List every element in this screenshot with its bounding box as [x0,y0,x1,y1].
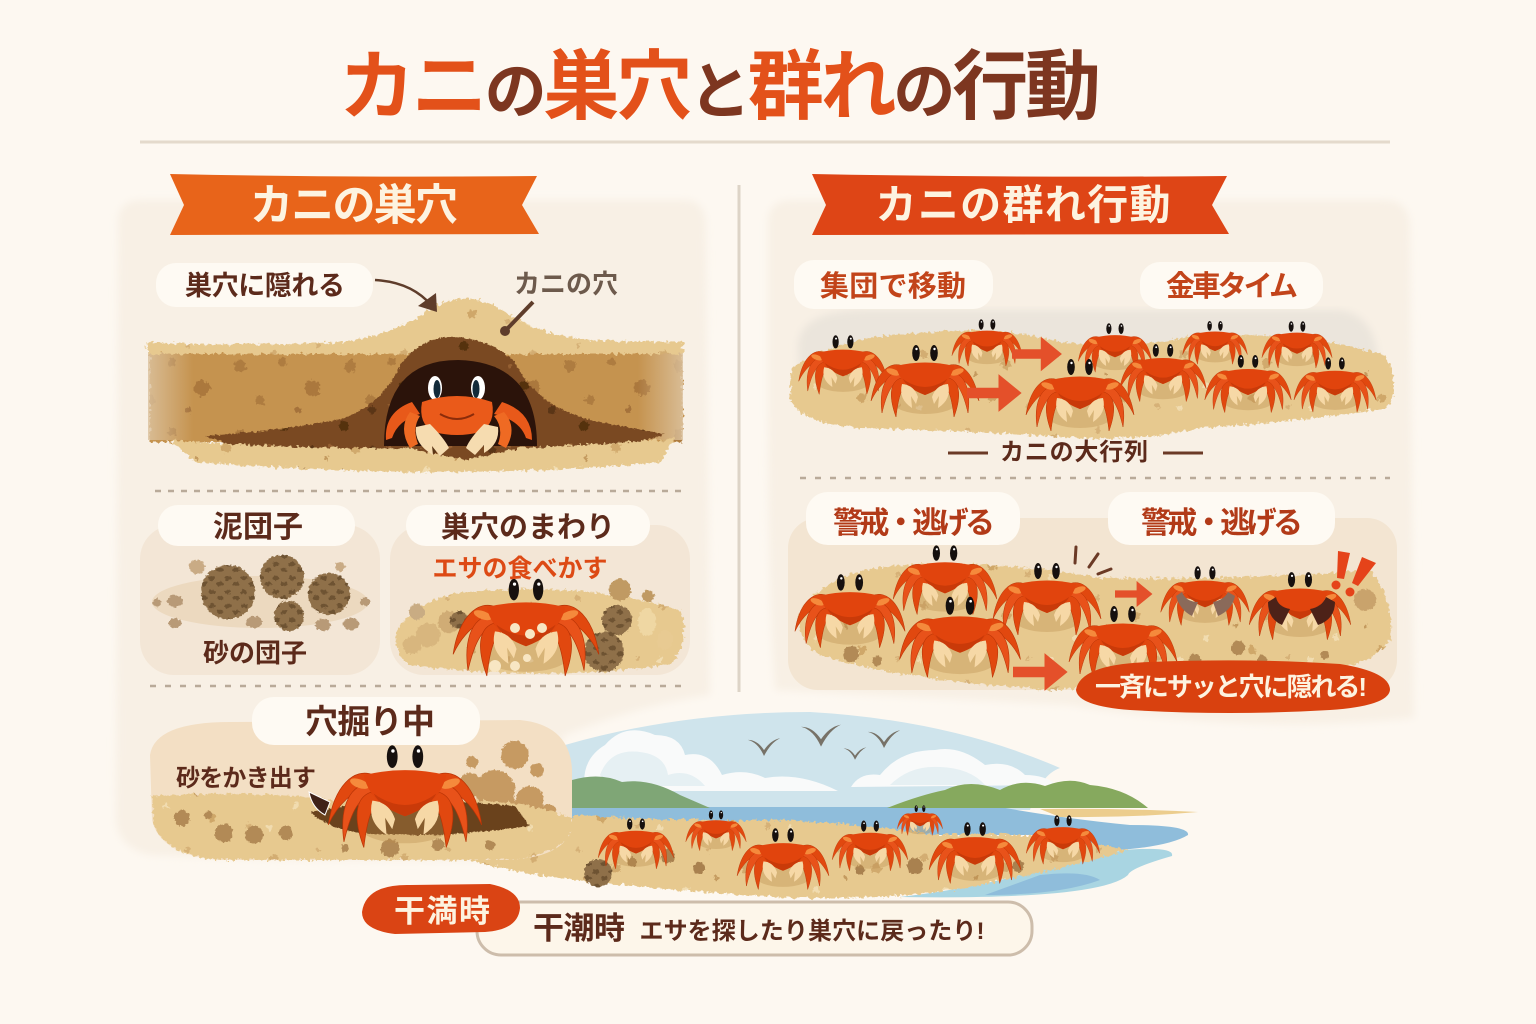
icon: mud balls [153,555,370,631]
caption box: 干潮時 [477,902,1032,955]
panel: left background [116,200,710,860]
icon: shock marks [1075,547,1111,574]
divider dashes [155,490,685,492]
panel: 警戒・逃げる [788,492,1397,713]
caption box: 干潮時: 干潮時 [533,911,625,946]
panel: 泥団子: 泥団子 [213,511,303,544]
icon: digging crab [328,745,482,848]
illustration: beach scene [470,712,1198,898]
icon: exclamation marks [1332,551,1376,596]
label: カニの穴: カニの穴 [514,269,618,299]
panel: 警戒・逃げる: 警戒・逃げる [833,507,995,540]
panel: 巣穴のまわり: エサの食べかす [432,555,608,583]
badge: 干満時 [362,884,520,934]
panel: right sand procession: 集団で移動 [820,270,966,303]
sky [565,712,1060,810]
icons: crab procession [799,319,1376,431]
badge: 干満時: 干満時 [394,894,490,929]
panel: 泥団子 [140,505,380,675]
panel: 泥団子: 砂の団子 [203,638,307,668]
sea [570,807,1188,850]
banner: カニの巣穴: カニの巣穴 [250,182,458,230]
divider dashes [150,685,690,687]
panel: right background [768,200,1414,724]
icons: alert crabs [795,545,1351,678]
icon: sand pellets [403,579,673,672]
panel: 巣穴のまわり [390,505,690,676]
icon: crab in burrow [386,376,532,456]
beach sand [470,815,1128,898]
icons: birds [748,725,900,760]
panel: right sand procession [790,260,1394,439]
icon: sand clumps [174,810,495,857]
label: カニの大行列: カニの大行列 [1000,439,1148,466]
caption box: 干潮時: エサを探したり巣穴に戻ったり! [640,918,984,945]
icon: thrown sand [458,741,556,828]
icon: sand balls on beach [584,849,1024,887]
arrows: movement [967,337,1062,412]
panel: 巣穴のまわり: 巣穴のまわり [441,511,615,544]
clouds [584,730,1057,791]
arrow: to mound [375,280,437,312]
icons: beach crabs [598,805,1100,889]
arrows: escape [1013,581,1152,691]
panel: right sand procession: 金車タイム [1166,270,1298,303]
callout: hide together: 一斉にサッと穴に隠れる! [1095,672,1367,702]
panel: 穴掘り中: 砂をかき出す [176,765,316,792]
banner: カニの巣穴 [170,174,539,235]
icon: crab eating [453,579,599,676]
panel: 穴掘り中: 穴掘り中 [305,703,435,740]
panel: 穴掘り中 [150,697,572,860]
label: カニの穴 [500,269,618,336]
callout: hide together [1076,660,1390,713]
illustration: burrow cross-section [146,298,683,472]
title: カニの巣穴と群れの行動 [339,45,1101,130]
banner: カニの群れ行動: カニの群れ行動 [876,182,1170,228]
label: 巣穴に隠れる: 巣穴に隠れる [185,271,345,301]
icon: sand clumps [843,589,1376,666]
hills [572,776,710,808]
banner: カニの群れ行動 [812,174,1229,235]
panel: 警戒・逃げる: 警戒・逃げる [1141,507,1303,540]
label: 巣穴に隠れる [156,263,373,307]
